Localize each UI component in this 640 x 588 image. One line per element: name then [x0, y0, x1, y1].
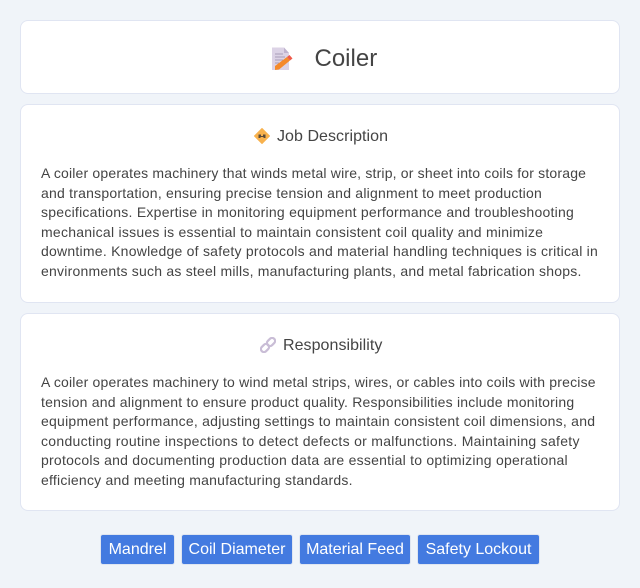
tag: Material Feed	[299, 534, 411, 565]
text: job description body: A coiler operates machinery that winds metal wire, strip, or sheet into coils for storage	[41, 165, 586, 181]
text: responsibility body: A coiler operates machinery to wind metal strips, wires, or cables into coils with precise	[41, 374, 596, 390]
text: job description body: and transportation, ensuring precise tension and alignment to meet production	[41, 185, 542, 201]
text: job description body	[41, 165, 598, 279]
heading: job description: Job Description	[277, 128, 388, 145]
panel: job description	[20, 104, 620, 303]
tag: Coil Diameter	[181, 534, 293, 565]
tag: Mandrel	[100, 534, 175, 565]
icon: orange diamond sign	[254, 128, 270, 144]
panel: title card	[20, 20, 620, 94]
text: job description body: downtime. Knowledge of safety protocols and material handling techniques is critical in	[41, 243, 598, 259]
text: job description body: mechanical issues is essential to maintain consistent coil quality and minimize	[41, 224, 543, 240]
text: responsibility body: efficiency and meeting manufacturing standards.	[41, 472, 353, 488]
text: responsibility body	[41, 374, 596, 488]
tag: Material Feed: Material Feed	[306, 541, 404, 558]
tag: Coil Diameter: Coil Diameter	[189, 541, 285, 558]
text: job description body: specifications. Expertise in monitoring equipment performance and troubleshooting	[41, 204, 574, 220]
tag: Safety Lockout: Safety Lockout	[426, 541, 531, 558]
text: job description body: environments such as steel mills, manufacturing plants, and metal fabrication shops.	[41, 263, 582, 279]
text: responsibility body: tension and alignment to ensure product quality. Responsibilities include monitoring	[41, 394, 574, 410]
icon: document with pencil	[272, 48, 292, 70]
text: responsibility body: equipment performance, adjusting settings to maintain consistent coil dimensions, and	[41, 413, 595, 429]
text: responsibility body: protocols and documenting production data are essential to optimizing operational	[41, 452, 568, 468]
tag: Safety Lockout	[417, 534, 540, 565]
panel: responsibility	[20, 313, 620, 511]
text: responsibility body: conducting routine inspections to detect defects or malfunctions. Maintaining safety	[41, 433, 580, 449]
heading: responsibility: Responsibility	[283, 337, 382, 354]
title: Coiler	[314, 45, 377, 72]
icon: chain link	[260, 337, 276, 353]
tag: Mandrel: Mandrel	[109, 541, 166, 558]
